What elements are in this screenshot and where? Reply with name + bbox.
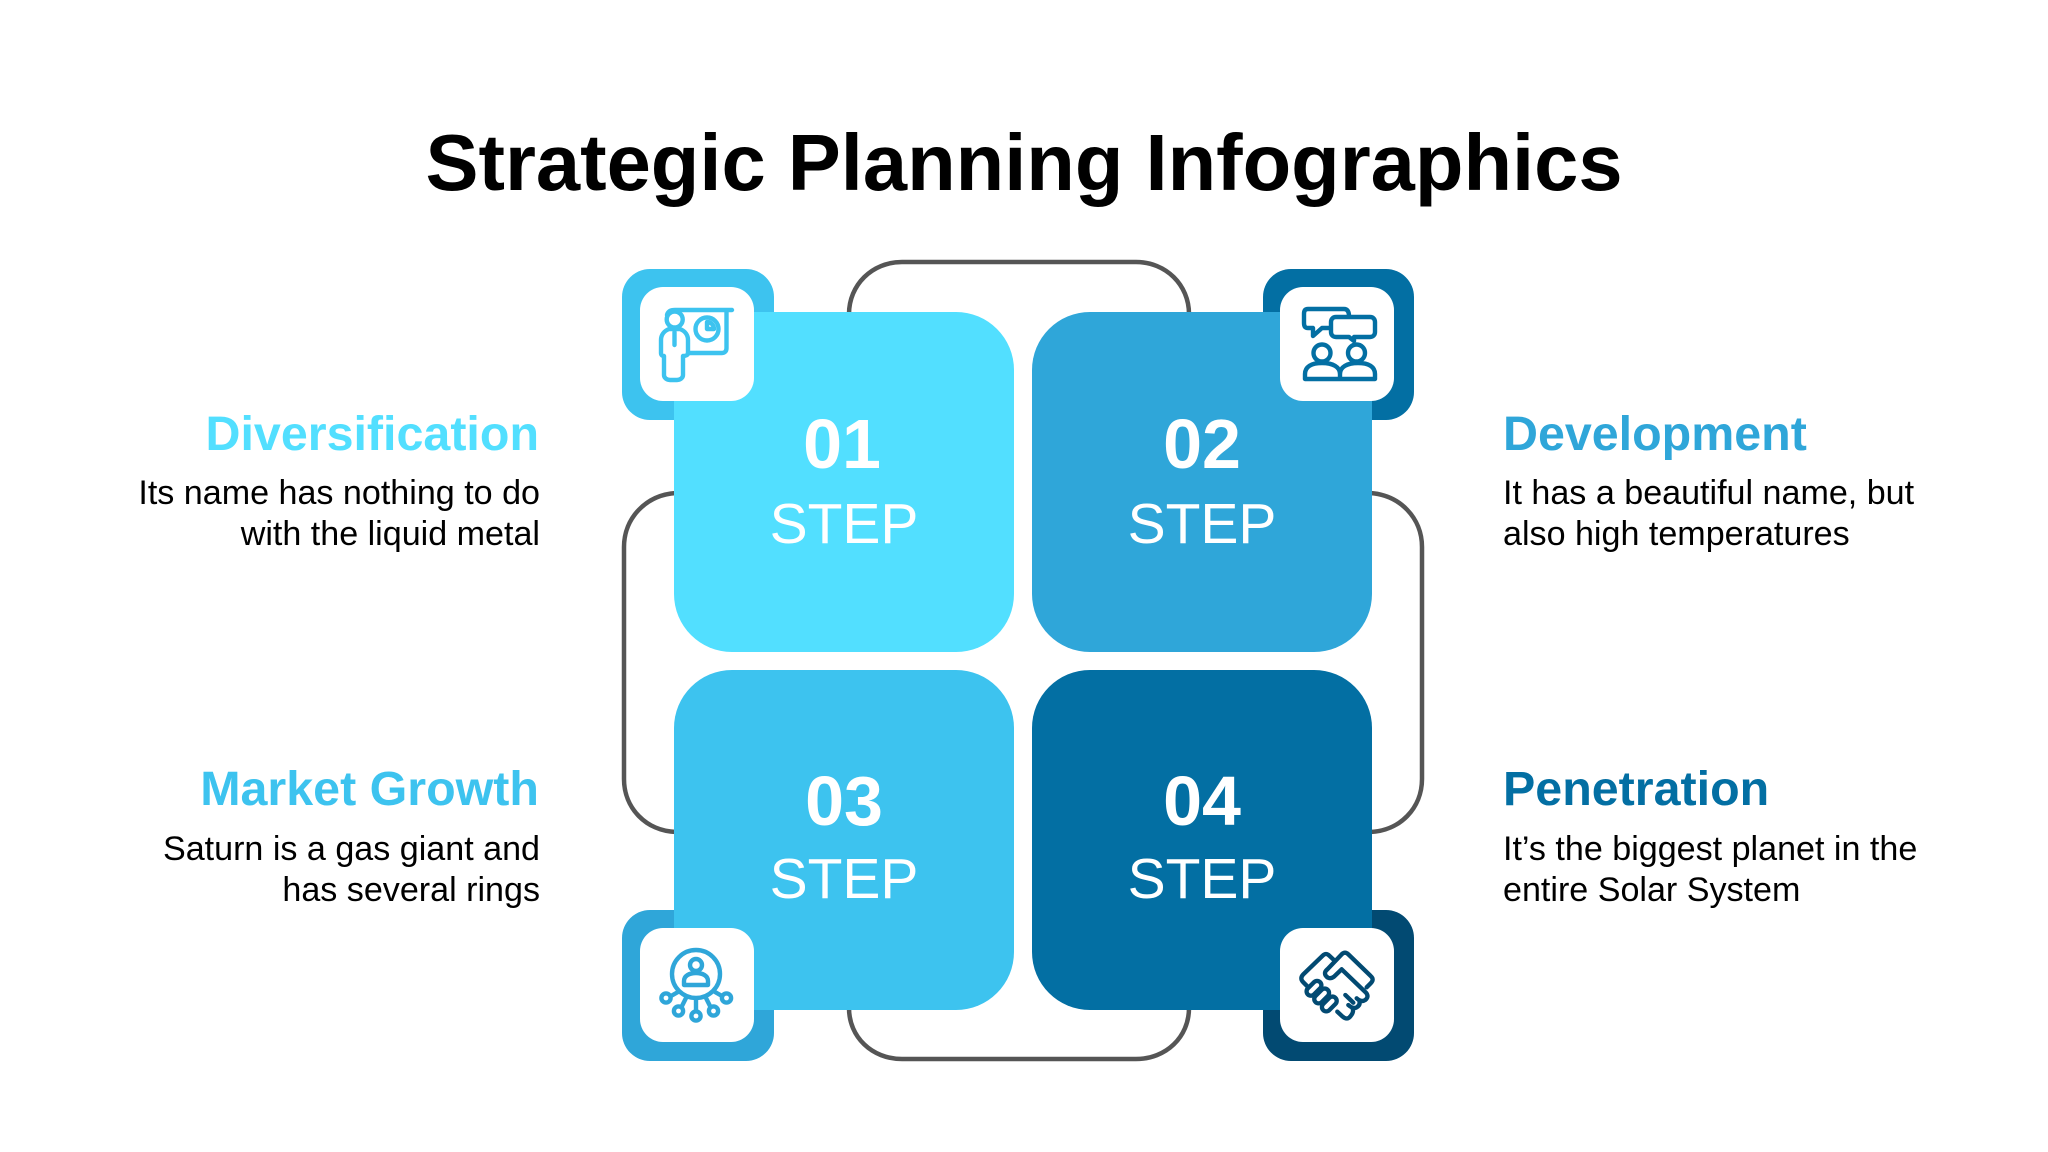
body: Penetration: It’s the biggest planet in the [1503,830,1917,868]
heading: Penetration: Penetration [1503,762,1769,816]
heading: Diversification: Diversification [206,407,539,461]
body: Diversification: Its name has nothing to do [138,474,540,512]
icon backing tile 3 [622,910,774,1061]
body line 2: Market Growth: has several rings [282,871,540,909]
text block: Market Growth [163,762,540,909]
text block: Diversification [138,407,540,553]
body line 2: Diversification: with the liquid metal [240,515,540,553]
body line 2: Development: also high temperatures [1503,515,1850,553]
icon: user network [640,928,754,1042]
step 04 number: 04 [1163,762,1241,840]
icon: people talking [1280,287,1394,401]
icon: handshake [1280,928,1394,1042]
body: Development: It has a beautiful name, but [1503,474,1915,512]
step 03 panel [674,670,1014,1010]
step 01 label: STEP [770,492,918,556]
icon backing tile 1 [622,269,774,420]
step 04 label: STEP [1128,847,1276,911]
body line 2: Penetration: entire Solar System [1503,871,1800,909]
step 03 number: 03 [805,762,883,840]
step 03 label: STEP [770,847,918,911]
step 01 number: 01 [803,405,881,483]
step 04 panel [1032,670,1372,1010]
text block: Penetration [1503,762,1917,909]
step 02 label: STEP [1128,492,1276,556]
heading: Development: Development [1503,407,1807,461]
step 02 number: 02 [1163,405,1241,483]
step 02 panel [1032,312,1372,652]
icon backing tile 4 [1263,910,1414,1061]
icon backing tile 2 [1263,269,1414,420]
heading: Market Growth: Market Growth [200,762,539,816]
title: Strategic Planning Infographics [425,118,1623,207]
text block: Development [1503,407,1915,553]
step 01 panel [674,312,1014,652]
body: Market Growth: Saturn is a gas giant and [163,830,540,868]
icon: presenter with chart [640,287,754,401]
connector lines [624,262,1422,1059]
